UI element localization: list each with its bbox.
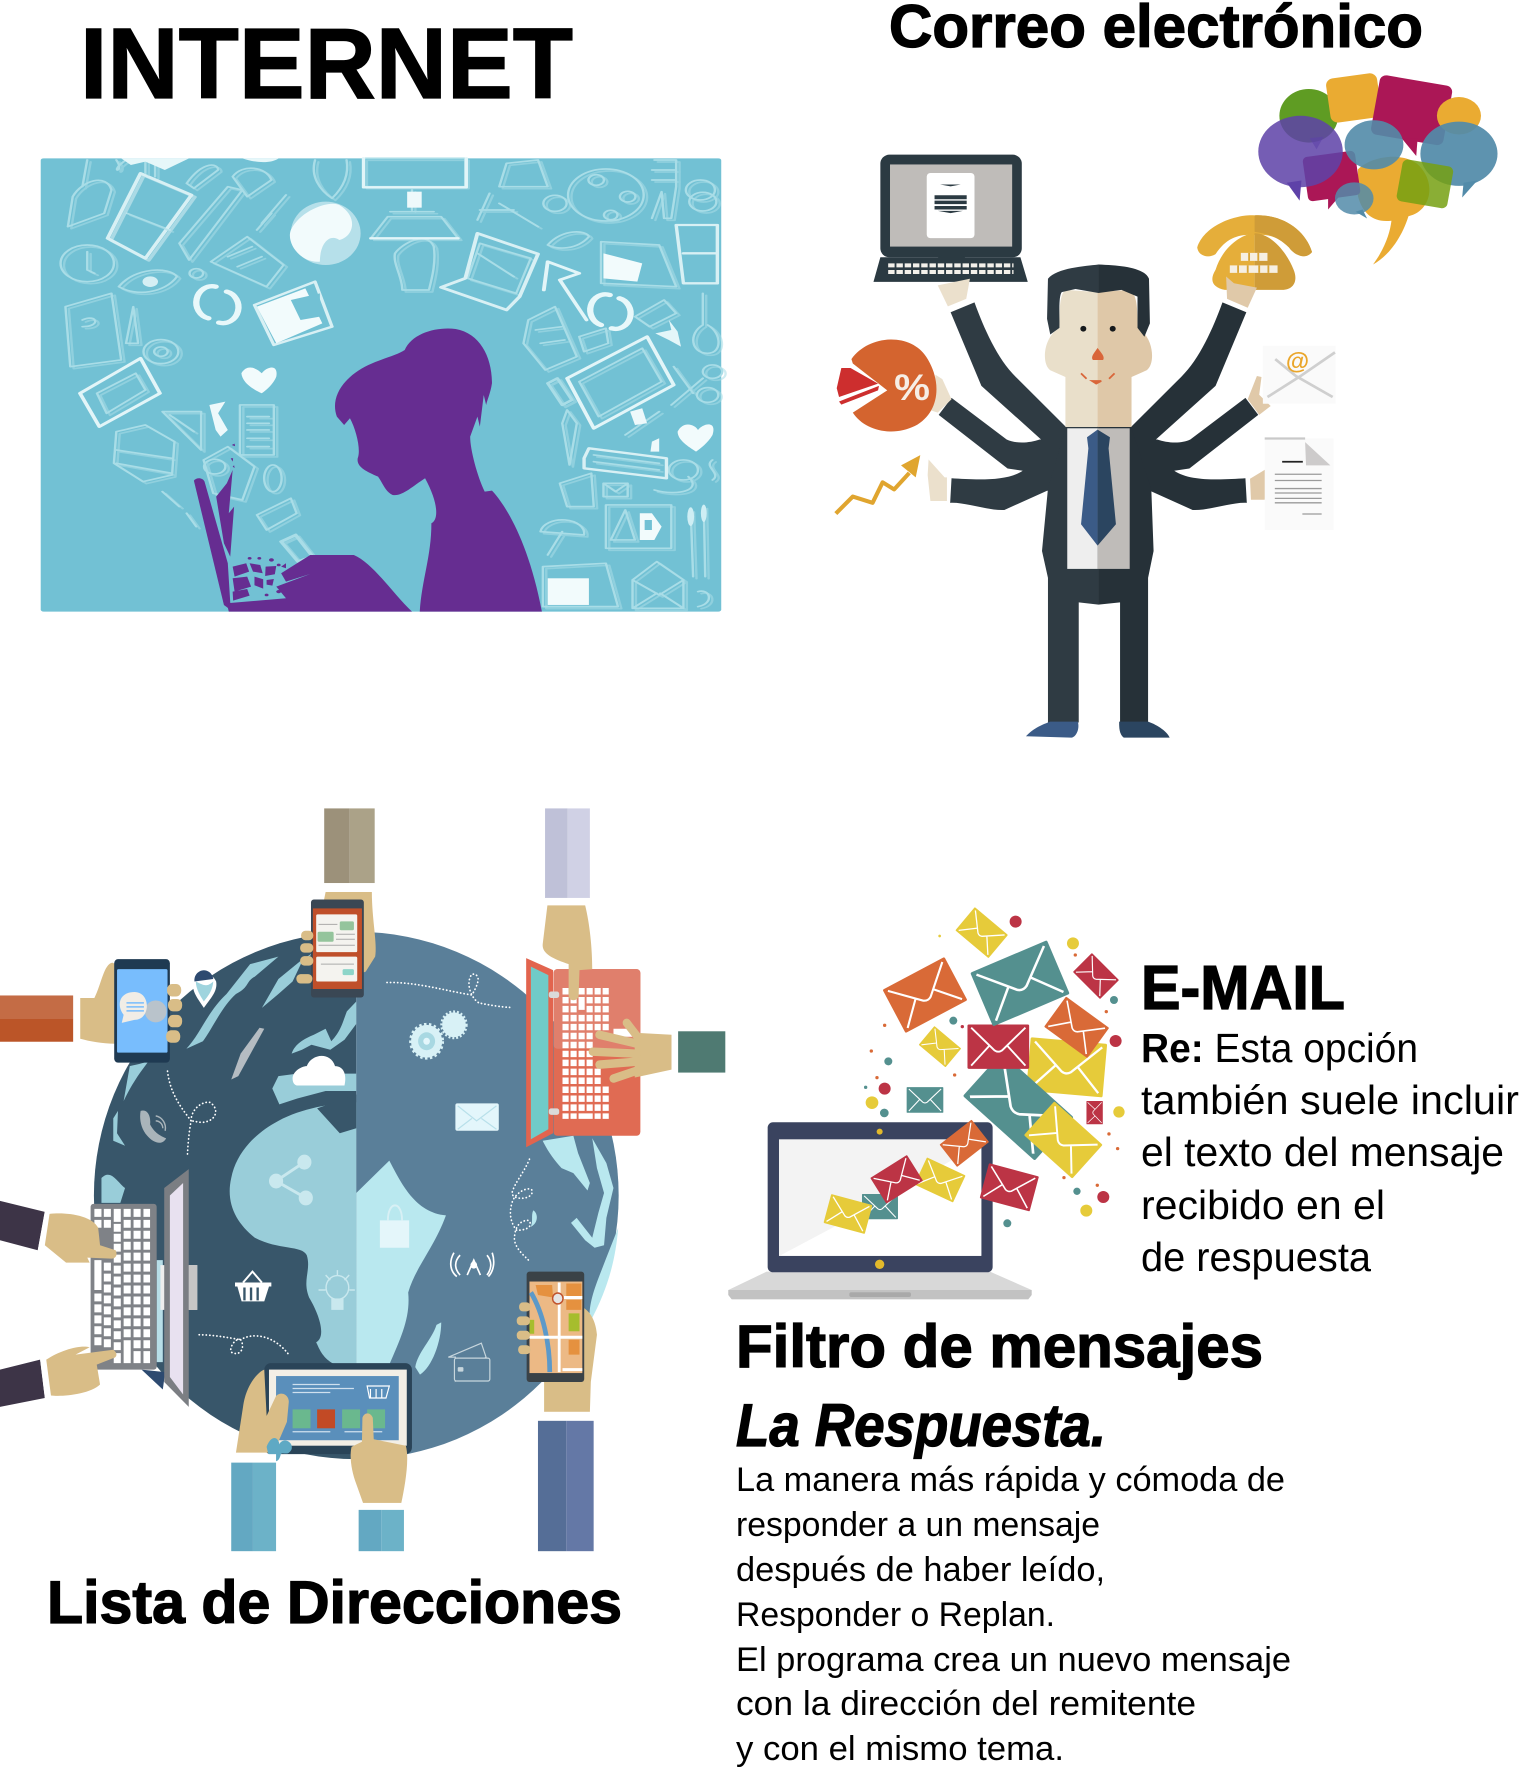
confetti dots <box>864 916 1125 1227</box>
paragraph: E-MAIL description: también suele incluir <box>1141 1077 1519 1123</box>
icon: growth arrow <box>836 455 920 514</box>
doodles background <box>61 158 726 610</box>
icon: email envelope: @ <box>1286 348 1309 374</box>
paragraph: La Respuesta description: La manera más rápida y cómoda de <box>736 1461 1285 1499</box>
paragraph: E-MAIL description: de respuesta <box>1141 1234 1371 1280</box>
icon: document <box>1265 439 1334 530</box>
icon: telephone <box>1197 215 1312 290</box>
paragraph: La Respuesta description: y con el mismo tema. <box>736 1730 1064 1768</box>
laptop <box>728 1122 1032 1299</box>
illustration: businessman multitasking <box>836 72 1498 738</box>
envelopes <box>824 907 1119 1234</box>
continents <box>101 944 356 1370</box>
globe icons <box>140 970 499 1381</box>
body and suit <box>1026 426 1170 738</box>
title: INTERNET: INTERNET <box>80 8 573 120</box>
paragraph: E-MAIL description: el texto del mensaje <box>1141 1129 1504 1175</box>
top-right arm and red laptop <box>526 808 725 1147</box>
paragraph: La Respuesta description: después de haber leído, <box>736 1551 1105 1589</box>
panel: internet illustration <box>41 158 726 612</box>
globe <box>94 932 619 1459</box>
hands <box>928 277 1272 501</box>
paragraph: E-MAIL description: Re: Esta opción <box>1141 1025 1418 1071</box>
paragraph: E-MAIL description <box>1141 1025 1519 1280</box>
paragraph: La Respuesta description: Responder o Replan. <box>736 1596 1055 1634</box>
heading: E-MAIL: E-MAIL <box>1141 954 1345 1023</box>
text block: E-MAIL <box>1141 954 1519 1280</box>
icon: email envelope <box>1263 346 1335 404</box>
paragraph: La Respuesta description <box>736 1461 1291 1768</box>
title: Lista de Direcciones: Lista de Direcciones <box>47 1569 622 1636</box>
arms <box>939 302 1258 510</box>
head <box>1045 264 1152 427</box>
heading: La Respuesta: La Respuesta. <box>736 1392 1106 1459</box>
paragraph: E-MAIL description: recibido en el <box>1141 1182 1385 1228</box>
silhouette: woman with laptop <box>194 329 542 612</box>
heading: Filtro de mensajes: Filtro de mensajes <box>736 1313 1263 1380</box>
icon: percent pie chart: % <box>894 367 930 408</box>
illustration: laptop sending envelopes <box>728 907 1125 1299</box>
top arm with tablet phone <box>296 808 376 997</box>
left arm with phone <box>0 959 182 1063</box>
speech bubbles <box>1258 72 1498 264</box>
paragraph: La Respuesta description: con la dirección del remitente <box>736 1685 1196 1723</box>
icon: laptop <box>873 155 1028 282</box>
bottom arms with tablet <box>231 1363 412 1551</box>
icon: percent pie chart <box>837 340 936 432</box>
right arm with map phone <box>517 1272 597 1551</box>
illustration: globe with hands and devices <box>0 808 725 1551</box>
paragraph: La Respuesta description: responder a un mensaje <box>736 1506 1100 1544</box>
left arms with keyboard and monitor <box>0 1169 197 1407</box>
paragraph: La Respuesta description: El programa crea un nuevo mensaje <box>736 1641 1291 1679</box>
globe dotted routes <box>168 974 532 1355</box>
